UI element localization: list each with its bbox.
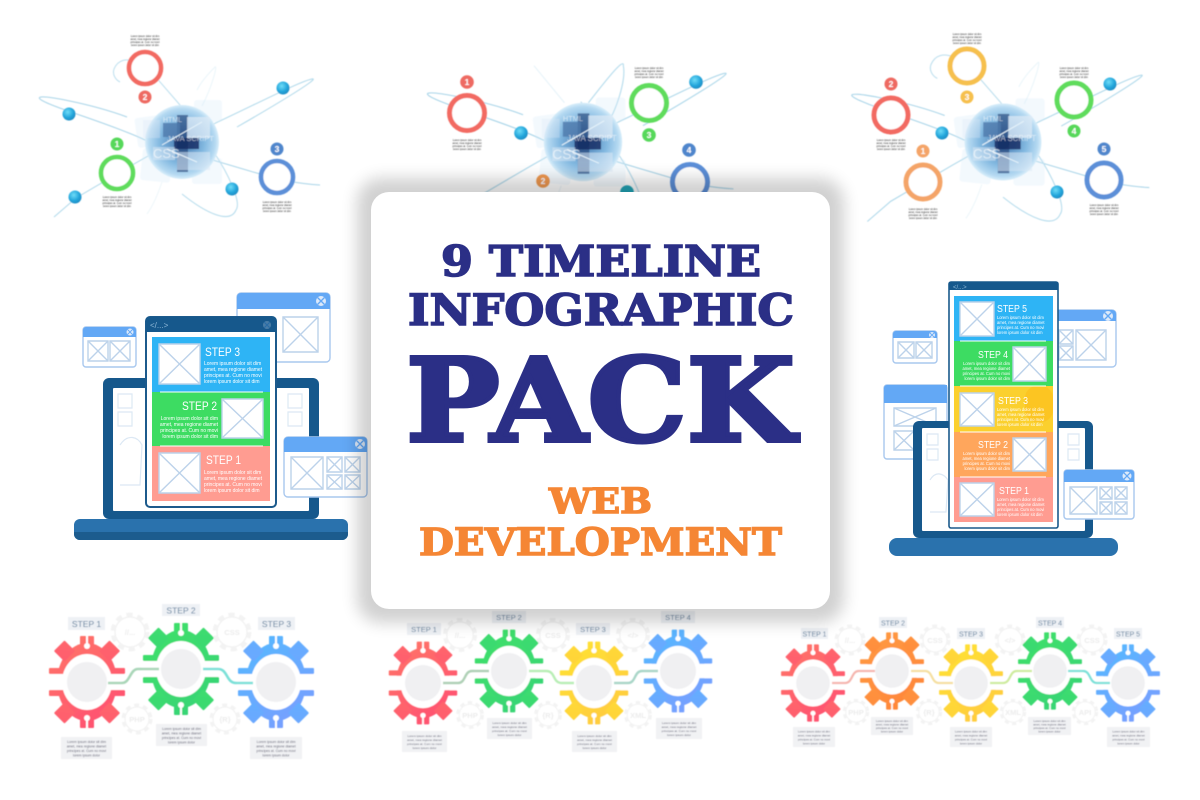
text boxes: principes at. Cum no movi: [1112, 738, 1145, 742]
step 1 panel: [152, 446, 270, 501]
background gears: {R}: [923, 708, 935, 717]
step 5 panel: Lorem ipsum dolor sit dim: [997, 315, 1044, 320]
window bottom right: [1064, 470, 1134, 519]
step 3 panel: Lorem ipsum dolor sit dim: [997, 407, 1044, 412]
text blocks: principes at. Cum no movi: [635, 73, 664, 76]
text blocks: amet, mea regione diamet: [952, 36, 982, 39]
text boxes: amet, mea regione diamet: [876, 722, 908, 726]
background gears: API: [1079, 708, 1091, 717]
text blocks: lorem ipsum dolor sit dim: [635, 76, 663, 79]
laptop base: [74, 519, 348, 540]
connectors: [108, 669, 253, 683]
orbits: [852, 55, 1149, 222]
text blocks: lorem ipsum dolor sit dim: [263, 210, 291, 213]
text blocks: Lorem ipsum dolor sit dim: [103, 196, 131, 199]
text boxes: Lorem ipsum dolor sit dim: [577, 734, 612, 738]
text boxes: principes at. Cum no movi: [67, 749, 106, 753]
text boxes: principes at. Cum no movi: [662, 729, 697, 733]
background gears: CSS: [927, 636, 943, 645]
background gears: PHP: [848, 708, 864, 717]
step badges: [110, 90, 284, 156]
text boxes: principes at. Cum no movi: [256, 749, 296, 753]
step 1 panel: lorem ipsum dolor sit dim: [997, 512, 1043, 517]
text blocks: lorem ipsum dolor sit dim: [909, 217, 937, 220]
text boxes: lorem ipsum dolor: [1038, 730, 1061, 734]
text boxes: Lorem ipsum dolor sit dim: [67, 740, 106, 744]
step 3 panel: [954, 386, 1053, 432]
step badges: 5: [1102, 144, 1107, 154]
text boxes: amet, mea regione diamet: [1112, 734, 1145, 738]
text boxes: amet, mea regione diamet: [162, 732, 201, 736]
text blocks: amet, mea regione diamet: [634, 70, 664, 73]
background gears: CSS: [545, 631, 561, 640]
text boxes: principes at. Cum no movi: [162, 736, 201, 740]
background gears: {R}: [219, 715, 231, 724]
connectors: [443, 671, 658, 683]
step labels: STEP 2: [166, 606, 196, 616]
step 3 panel: principes at. Cum no movi: [997, 417, 1044, 422]
window bottom right: [284, 437, 367, 497]
text boxes: amet, mea regione diamet: [798, 734, 830, 738]
globe: CSS: [153, 146, 180, 161]
text boxes: Lorem ipsum dolor sit dim: [876, 719, 909, 723]
laptop base: [889, 538, 1118, 556]
panel: globe infographic with 5 steps: [852, 33, 1149, 222]
title: pack: PACK: [406, 334, 799, 469]
background gears: //...: [845, 636, 855, 645]
globe: JAVA SCRIPT: [567, 134, 617, 143]
text boxes: lorem ipsum dolor: [960, 742, 982, 746]
globe: JAVA SCRIPT: [987, 134, 1036, 143]
text blocks: principes at. Cum no movi: [1060, 73, 1089, 76]
background gears: [445, 620, 651, 728]
step rings: [450, 86, 708, 200]
globe: CSS: [973, 147, 1001, 162]
phone: </...>: [953, 285, 967, 291]
step 5 panel: [954, 296, 1053, 341]
step 1 panel: STEP 1: [206, 455, 241, 467]
step 3 panel: amet, mea regione diamet: [204, 367, 263, 373]
background gears: //...: [125, 628, 135, 637]
text blocks: Lorem ipsum dolor sit dim: [877, 139, 905, 142]
step 4 panel: [954, 340, 1053, 386]
text boxes: principes at. Cum no movi: [407, 742, 442, 746]
text blocks: Lorem ipsum dolor sit dim: [1090, 204, 1118, 207]
text boxes: Lorem ipsum dolor sit dim: [257, 740, 296, 744]
step labels: STEP 1: [72, 619, 101, 629]
text blocks: principes at. Cum no movi: [263, 207, 292, 210]
text boxes: principes at. Cum no movi: [798, 738, 831, 742]
step rings: [101, 52, 293, 193]
text blocks: [452, 67, 664, 151]
text blocks: lorem ipsum dolor sit dim: [453, 148, 481, 151]
text boxes: amet, mea regione diamet: [955, 734, 987, 738]
step 2 panel: principes at. Cum no movi: [160, 428, 218, 434]
step badges: [884, 78, 1110, 158]
step 2 panel: Lorem ipsum dolor sit dim: [161, 416, 218, 422]
central title card: [371, 192, 830, 609]
text boxes: principes at. Cum no movi: [492, 729, 527, 733]
window small left: [893, 331, 937, 363]
step 5 panel: STEP 5: [997, 304, 1027, 315]
step badges: 3: [275, 144, 280, 154]
step 5 panel: amet, mea regione diamet: [997, 320, 1045, 325]
text blocks: principes at. Cum no movi: [877, 145, 906, 148]
globe: [532, 97, 625, 187]
step 3 panel: STEP 3: [998, 396, 1028, 407]
step 3 panel: amet, mea regione diamet: [997, 412, 1045, 417]
step 2 panel: [954, 432, 1053, 477]
text blocks: principes at. Cum no movi: [1090, 210, 1119, 213]
text boxes: Lorem ipsum dolor sit dim: [492, 721, 527, 725]
step 1 panel: lorem ipsum dolor sit dim: [204, 488, 260, 494]
step labels: STEP 4: [1038, 620, 1062, 628]
text blocks: amet, mea regione diamet: [130, 38, 160, 41]
text blocks: Lorem ipsum dolor sit dim: [453, 139, 481, 142]
phone: [146, 317, 276, 507]
step 4 panel: STEP 4: [978, 350, 1008, 361]
step 1 panel: amet, mea regione diamet: [997, 502, 1045, 507]
text boxes: amet, mea regione diamet: [577, 738, 612, 742]
step 2 panel: amet, mea regione diamet: [160, 422, 219, 428]
background gears: XML: [1005, 708, 1021, 717]
title: infographic: INFOGRAPHIC: [408, 286, 794, 336]
phone: </...>: [150, 321, 169, 330]
step 5 panel: principes at. Cum no movi: [997, 325, 1044, 330]
text blocks: amet, mea regione diamet: [262, 204, 292, 207]
step labels: STEP 3: [580, 625, 606, 634]
step labels: [801, 617, 1142, 639]
step 4 panel: principes at. Cum no movi: [963, 371, 1010, 376]
background gears: PHP: [129, 715, 145, 724]
text blocks: principes at. Cum no movi: [453, 145, 482, 148]
title: 9 timeline: 9 TIMELINE: [441, 237, 761, 286]
orbits: [427, 64, 733, 224]
text boxes: Lorem ipsum dolor sit dim: [662, 721, 697, 725]
step 1 panel: STEP 1: [999, 486, 1029, 497]
step 5 panel: lorem ipsum dolor sit dim: [997, 330, 1043, 335]
step 4 panel: Lorem ipsum dolor sit dim: [963, 361, 1011, 366]
panel: globe infographic with 3 steps: [39, 35, 320, 217]
text blocks: lorem ipsum dolor sit dim: [103, 205, 131, 208]
panel: gear timeline 4 steps: [388, 611, 713, 752]
step 2 panel: lorem ipsum dolor sit dim: [162, 434, 218, 440]
text blocks: amet, mea regione diamet: [452, 142, 482, 145]
step 1 panel: amet, mea regione diamet: [204, 476, 263, 482]
text boxes: Lorem ipsum dolor sit dim: [1112, 730, 1145, 734]
text blocks: amet, mea regione diamet: [876, 142, 906, 145]
gears: [48, 622, 315, 729]
background gears: CSS: [1084, 636, 1100, 645]
background gears: CSS: [224, 628, 240, 637]
text boxes: amet, mea regione diamet: [1033, 722, 1066, 726]
step 1 panel: [954, 476, 1053, 522]
text boxes: principes at. Cum no movi: [577, 742, 612, 746]
text boxes: Lorem ipsum dolor sit dim: [955, 730, 988, 734]
gears: [388, 629, 713, 725]
text blocks: [102, 35, 292, 213]
text blocks: lorem ipsum dolor sit dim: [877, 148, 905, 151]
globe: HTML: [983, 114, 1003, 123]
text boxes: lorem ipsum dolor: [168, 740, 196, 744]
text blocks: principes at. Cum no movi: [909, 214, 938, 217]
text blocks: Lorem ipsum dolor sit dim: [1060, 67, 1088, 70]
text blocks: lorem ipsum dolor sit dim: [953, 42, 981, 45]
text boxes: Lorem ipsum dolor sit dim: [162, 727, 201, 731]
step 1 panel: Lorem ipsum dolor sit dim: [997, 497, 1044, 502]
step 3 panel: principes at. Cum no movi: [204, 373, 262, 379]
step badges: 3: [965, 92, 970, 102]
step 4 panel: amet, mea regione diamet: [962, 366, 1011, 371]
step labels: STEP 1: [802, 632, 827, 638]
text boxes: lorem ipsum dolor: [667, 733, 691, 737]
step badges: 2: [143, 92, 148, 102]
globe: CSS: [552, 147, 581, 162]
background gears: {R}: [542, 711, 554, 720]
text boxes: Lorem ipsum dolor sit dim: [407, 734, 442, 738]
step badges: 1: [115, 139, 120, 149]
text blocks: principes at. Cum no movi: [953, 39, 982, 42]
text boxes: lorem ipsum dolor: [881, 730, 903, 734]
text blocks: amet, mea regione diamet: [908, 211, 938, 214]
step 2 panel: STEP 2: [182, 401, 217, 413]
globe: [134, 100, 222, 184]
step 1 panel: principes at. Cum no movi: [204, 482, 262, 488]
orbits: [39, 60, 320, 217]
globe: JAVA SCRIPT: [167, 134, 214, 143]
background gears: </>: [628, 631, 639, 640]
text boxes: principes at. Cum no movi: [1033, 726, 1066, 730]
step badges: 2: [541, 176, 546, 186]
text blocks: lorem ipsum dolor sit dim: [1090, 213, 1118, 216]
background gears: XML: [630, 711, 646, 720]
panel: laptop with 3 step phone: [74, 293, 367, 540]
text boxes: lorem ipsum dolor: [498, 733, 521, 737]
gears: [780, 632, 1161, 722]
text blocks: principes at. Cum no movi: [103, 202, 132, 205]
laptop screen: [913, 421, 1093, 538]
step rings: [874, 49, 1121, 199]
step labels: STEP 1: [411, 625, 437, 634]
step 3 panel: Lorem ipsum dolor sit dim: [204, 361, 261, 367]
globe: HTML: [563, 114, 583, 123]
orbit balls: [62, 82, 290, 204]
text blocks: lorem ipsum dolor sit dim: [131, 44, 159, 47]
step badges: [460, 75, 696, 188]
globe: HTML: [163, 117, 182, 124]
step 1 panel: Lorem ipsum dolor sit dim: [204, 470, 261, 476]
background gears: [836, 626, 1106, 724]
text blocks: amet, mea regione diamet: [102, 199, 132, 202]
text blocks: [876, 33, 1119, 220]
step 1 panel: principes at. Cum no movi: [997, 507, 1044, 512]
text boxes: amet, mea regione diamet: [492, 725, 527, 729]
step 2 panel: STEP 2: [978, 440, 1008, 451]
text boxes: lorem ipsum dolor: [803, 742, 825, 746]
step badges: 1: [465, 77, 470, 87]
subtitle: web: WEB: [548, 481, 652, 522]
text boxes: principes at. Cum no movi: [955, 738, 988, 742]
text blocks: Lorem ipsum dolor sit dim: [635, 67, 663, 70]
step 2 panel: Lorem ipsum dolor sit dim: [963, 451, 1011, 456]
connectors: [832, 671, 1110, 683]
text boxes: lorem ipsum dolor: [1117, 742, 1140, 746]
text blocks: lorem ipsum dolor sit dim: [1060, 76, 1088, 79]
window top right: [1050, 310, 1116, 367]
step 3 panel: lorem ipsum dolor sit dim: [997, 422, 1043, 427]
phone: [949, 282, 1058, 528]
step badges: 4: [687, 145, 692, 155]
step labels: STEP 5: [1116, 632, 1140, 638]
text boxes: amet, mea regione diamet: [256, 744, 296, 748]
window big left: [884, 385, 947, 459]
background gears: [112, 614, 250, 733]
background gears: </>: [1005, 636, 1016, 645]
step labels: [407, 611, 695, 635]
step 2 panel: principes at. Cum no movi: [963, 461, 1010, 466]
window top right: [237, 293, 330, 362]
background gears: //...: [455, 631, 465, 640]
text blocks: amet, mea regione diamet: [1089, 207, 1119, 210]
window top left: [83, 327, 136, 367]
step 2 panel: amet, mea regione diamet: [962, 456, 1011, 461]
text boxes: lorem ipsum dolor: [263, 754, 290, 758]
card shadow: [357, 178, 844, 623]
text boxes: amet, mea regione diamet: [67, 744, 106, 748]
text boxes: Lorem ipsum dolor sit dim: [1033, 719, 1066, 723]
text blocks: Lorem ipsum dolor sit dim: [953, 33, 981, 36]
step 4 panel: lorem ipsum dolor sit dim: [964, 376, 1011, 381]
text boxes: lorem ipsum dolor: [583, 746, 606, 750]
panel: gear timeline 5 steps: [780, 617, 1161, 747]
text boxes: [61, 724, 302, 759]
step labels: STEP 2: [496, 613, 522, 622]
background gears: PHP: [462, 711, 478, 720]
text blocks: Lorem ipsum dolor sit dim: [131, 35, 159, 38]
text blocks: Lorem ipsum dolor sit dim: [263, 201, 291, 204]
text blocks: principes at. Cum no movi: [131, 41, 160, 44]
subtitle: development: DEVELOPMENT: [419, 520, 783, 564]
step 3 panel: STEP 3: [205, 347, 240, 359]
text boxes: principes at. Cum no movi: [876, 726, 909, 730]
step 3 panel: lorem ipsum dolor sit dim: [204, 379, 260, 385]
text boxes: lorem ipsum dolor: [73, 754, 101, 758]
step badges: 3: [647, 130, 652, 140]
panel: globe infographic with 4 steps: [427, 64, 733, 224]
text boxes: [793, 717, 1150, 747]
orbit balls: [936, 78, 1116, 198]
step labels: [68, 604, 295, 630]
panel: laptop with 5 step phone: [884, 282, 1134, 556]
panel: gear timeline 3 steps: [48, 604, 315, 759]
step 3 panel: [152, 337, 270, 392]
text boxes: amet, mea regione diamet: [407, 738, 442, 742]
orbit balls: [514, 75, 703, 199]
step badges: 4: [1072, 126, 1077, 136]
step labels: STEP 3: [262, 619, 291, 629]
step labels: STEP 3: [959, 632, 983, 638]
step 2 panel: lorem ipsum dolor sit dim: [964, 466, 1011, 471]
laptop screen: [103, 378, 319, 519]
step 2 panel: [152, 392, 270, 446]
step labels: STEP 4: [665, 613, 691, 622]
text boxes: lorem ipsum dolor: [413, 746, 436, 750]
text boxes: amet, mea regione diamet: [662, 725, 697, 729]
globe: [953, 98, 1045, 186]
step badges: 1: [921, 146, 926, 156]
step labels: STEP 2: [881, 620, 905, 628]
text blocks: Lorem ipsum dolor sit dim: [909, 208, 937, 211]
step badges: 2: [889, 79, 894, 89]
text boxes: Lorem ipsum dolor sit dim: [798, 730, 831, 734]
text blocks: amet, mea regione diamet: [1059, 70, 1089, 73]
text boxes: [402, 718, 702, 752]
